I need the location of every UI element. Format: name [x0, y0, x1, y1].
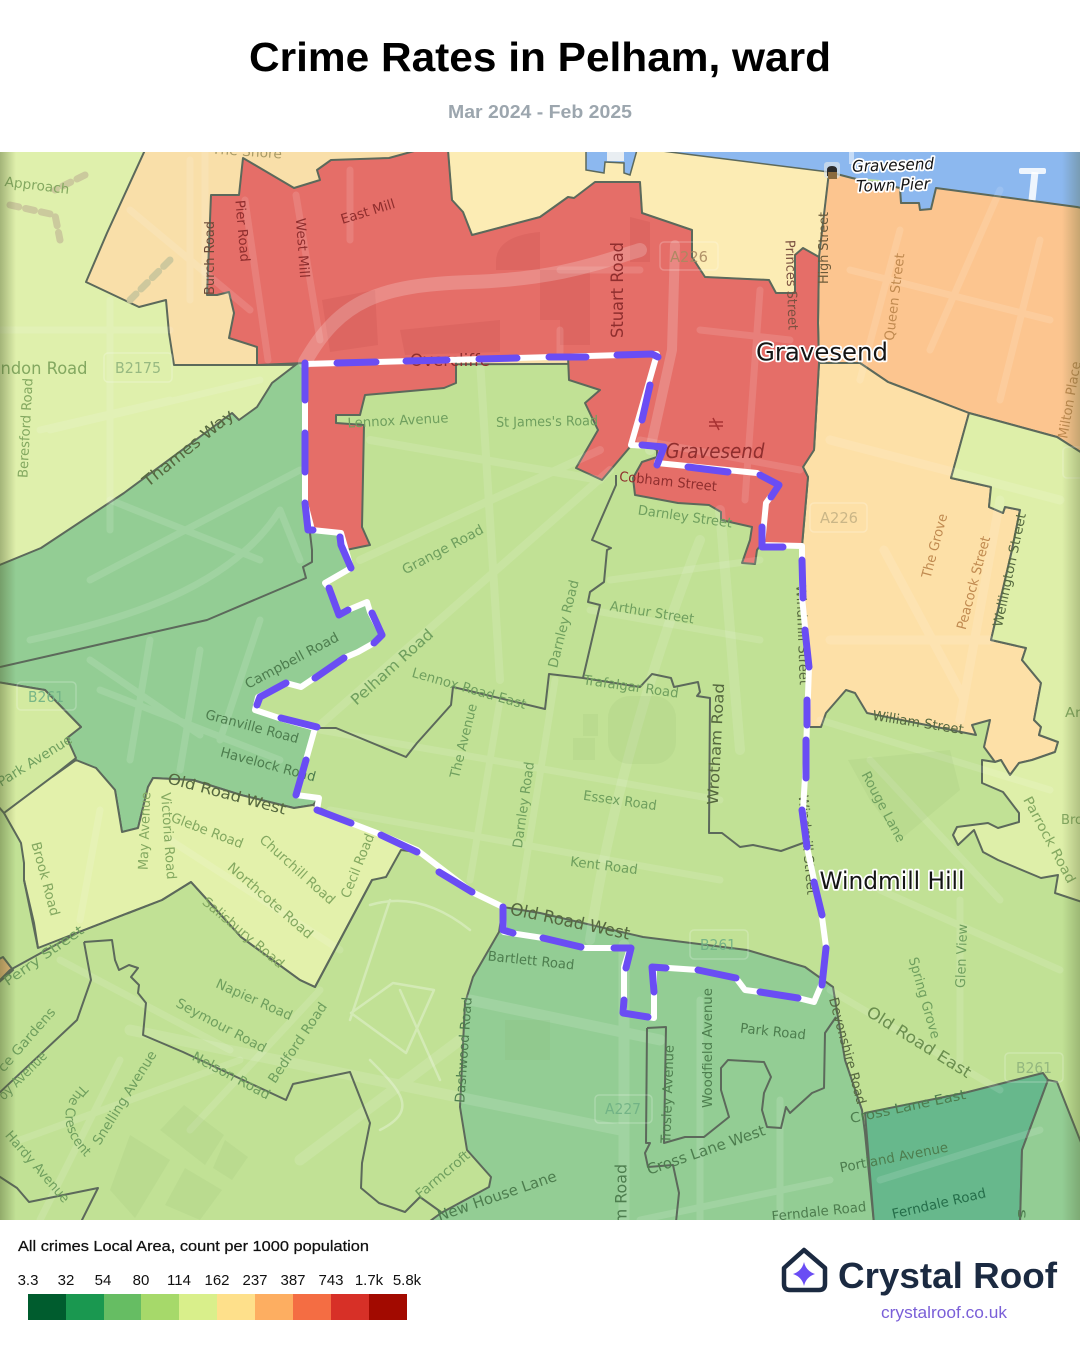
logo wordmark: Crystal Roof [838, 1255, 1058, 1296]
road name labels: Parrock Road [1019, 794, 1079, 886]
road name labels: May Avenue [136, 792, 154, 870]
road name labels: Lennox Avenue [347, 410, 449, 432]
road name labels: Napier Road [213, 976, 295, 1024]
road number signs: B261 [28, 688, 64, 706]
road name labels: Overcliffe [410, 351, 490, 371]
road name labels: Portland Avenue [838, 1140, 950, 1176]
title [249, 34, 831, 122]
place label: Gravesend: Gravesend [756, 338, 888, 366]
road name labels: High Street [816, 212, 832, 284]
road name labels: Granville Road [204, 707, 300, 747]
road name labels: Rouge Lane [858, 769, 908, 845]
road name labels: Thames Way [138, 405, 237, 491]
river water [640, 150, 1080, 215]
road number signs: B2175 [115, 359, 161, 377]
road name labels: Bedford Road [265, 1000, 331, 1086]
website link: crystalroof.co.uk [881, 1304, 1008, 1322]
road name labels: Cross Lane East [849, 1087, 967, 1127]
road name labels: Old Road East [863, 1002, 975, 1082]
road name labels: Churchill Road [256, 832, 338, 908]
legend values: 387 [280, 1272, 306, 1289]
legend values: 114 [167, 1272, 191, 1289]
road name labels: Pier Road [231, 199, 253, 263]
choropleth map [0, 152, 1080, 1220]
road name labels: Brook Road [27, 840, 63, 918]
road name labels: Northcote Road [224, 860, 316, 942]
ward boundary white line [255, 354, 826, 1018]
region: far south-east [1020, 1080, 1080, 1224]
road name labels: Bartlett Road [487, 948, 575, 974]
road number signs: A226 [820, 509, 858, 527]
road number signs [17, 242, 1080, 1123]
legend colour bar [28, 1294, 407, 1320]
region: south lower crime [426, 907, 874, 1224]
region: Park Avenue [0, 682, 81, 813]
road name labels: Windmill Street [795, 794, 819, 896]
place label: Windmill Hill: Windmill Hill [820, 867, 964, 895]
region: town centre east high [818, 172, 1080, 453]
road name labels: Devonshire Road [825, 996, 869, 1106]
road name labels: Old Road West [508, 900, 632, 945]
road name labels: Darnley Road [545, 578, 583, 670]
road name labels: Cecil Road [338, 831, 378, 901]
title: Mar 2024 - Feb 2025 [448, 101, 632, 122]
road name labels: Nelson Road [189, 1049, 273, 1103]
road name labels: Old Road West [166, 770, 288, 819]
road number signs: B261 [1016, 1059, 1052, 1077]
road name labels: Trosley Avenue [658, 1045, 678, 1144]
road name labels: St James's Road [496, 413, 598, 431]
region: west lower crime [0, 363, 382, 832]
road number signs: B261 [700, 936, 736, 954]
road name labels: Hardy Avenue [1, 1128, 73, 1206]
road name labels: Wrotham Road [704, 683, 728, 805]
road name labels: Approach [4, 174, 70, 198]
road name labels: Farmcroft [413, 1148, 473, 1202]
legend values: 237 [242, 1272, 268, 1289]
road name labels: The Avenue [447, 702, 481, 781]
legend values: 5.8k [393, 1272, 422, 1289]
road name labels: Wellington Street [990, 512, 1030, 628]
legend title: All crimes Local Area, count per 1000 population [18, 1238, 369, 1255]
title: Crime Rates in Pelham, ward [249, 34, 831, 80]
road name labels: Glen View [953, 924, 971, 988]
legend [18, 1238, 422, 1320]
road number signs: A227 [605, 1100, 641, 1118]
pier label: Gravesend Town Pier: Town Pier [856, 174, 932, 196]
piers [849, 150, 1046, 200]
road name labels: Lennox Road East [410, 665, 528, 713]
region: south-east moderate [802, 363, 1058, 775]
road name labels: Woodfield Avenue [700, 988, 716, 1108]
road name labels: Kent Road [569, 854, 639, 878]
road name labels: Burch Road [202, 221, 218, 295]
internal boundaries [0, 475, 836, 1222]
road name labels: Trafalgar Road [581, 672, 680, 702]
road name labels: Stuart Road [608, 242, 628, 338]
legend values: 743 [318, 1272, 344, 1289]
road name labels: Spring Grove [905, 955, 943, 1041]
legend values: 162 [204, 1272, 230, 1289]
region: south-east lowest crime [865, 1073, 1048, 1224]
legend values: 80 [133, 1272, 149, 1289]
road name labels: Dashwood Road [452, 997, 476, 1103]
region: east low crime [951, 413, 1080, 902]
road name labels: Cobham Street [618, 469, 718, 495]
road name labels: The Grove [918, 512, 951, 581]
legend values: 54 [95, 1272, 111, 1289]
pier label: Gravesend Town Pier [852, 154, 935, 196]
pier label: Gravesend Town Pier: Gravesend [852, 154, 935, 176]
map edge shading [0, 152, 1080, 1220]
park and ground features [110, 696, 960, 1220]
road name labels: Victoria Road [157, 792, 179, 880]
region: orange fragment [0, 957, 13, 984]
darker building blocks in high crime area [322, 217, 650, 355]
legend values: 3.3 [18, 1272, 38, 1289]
road name labels: East Mill [339, 196, 397, 228]
region: north centre moderate [448, 150, 829, 293]
region: Glebe Road low crime [4, 760, 417, 987]
road name labels: Essex Road [582, 788, 658, 814]
region: north-west moderate [86, 150, 819, 365]
road name labels: Perry Street [1, 922, 87, 990]
icon: ferry pier [824, 162, 840, 179]
road name labels: Grange Road [400, 522, 486, 578]
region: central high crime [207, 150, 819, 564]
road name labels: Pelham Road [347, 625, 437, 709]
road name labels: s [1014, 1209, 1030, 1219]
road name labels: Arthur Street [609, 598, 695, 628]
road name labels: Salisbury Road [199, 894, 287, 972]
legend values: 32 [58, 1272, 74, 1289]
icon: house with star [784, 1250, 825, 1290]
road name labels: Darnley Street [637, 502, 733, 532]
road name labels: Windmill Street [792, 585, 812, 685]
legend values: 1.7k [355, 1272, 384, 1289]
road name labels: Campbell Road [242, 630, 342, 692]
road name labels: West Mill [292, 218, 312, 278]
road name labels: Peacock Street [954, 535, 994, 631]
region: north-west low crime [0, 152, 298, 565]
road name labels: Beresford Road [15, 378, 37, 478]
road name labels: Snelling Avenue [90, 1048, 160, 1148]
station label: Gravesend: Gravesend [666, 439, 765, 463]
road name labels: Park Road [739, 1021, 807, 1043]
road name labels: Glebe Road [169, 810, 245, 852]
road name labels: William Street [871, 708, 965, 738]
road name labels: The Crescent [65, 1086, 90, 1157]
road number signs: A226 [670, 248, 708, 266]
road name labels: Princes Street [781, 240, 801, 330]
road name labels: Queen Street [882, 252, 908, 342]
road name labels: Ar [1065, 705, 1080, 721]
dock inlet [586, 150, 637, 175]
legend values [18, 1272, 422, 1289]
road name labels: Cross Lane West [644, 1121, 768, 1179]
logo: Crystal Roof [782, 1248, 1058, 1322]
ward boundary purple dashes [257, 354, 826, 1017]
road name labels: Seymour Road [173, 995, 269, 1057]
road network [0, 150, 1060, 1220]
road name labels: ndon Road [0, 359, 88, 379]
road name labels: Havelock Road [219, 745, 317, 785]
base ward area [0, 152, 1080, 1220]
icon: rail station [709, 418, 723, 430]
road name labels: Darnley Road [510, 761, 538, 849]
